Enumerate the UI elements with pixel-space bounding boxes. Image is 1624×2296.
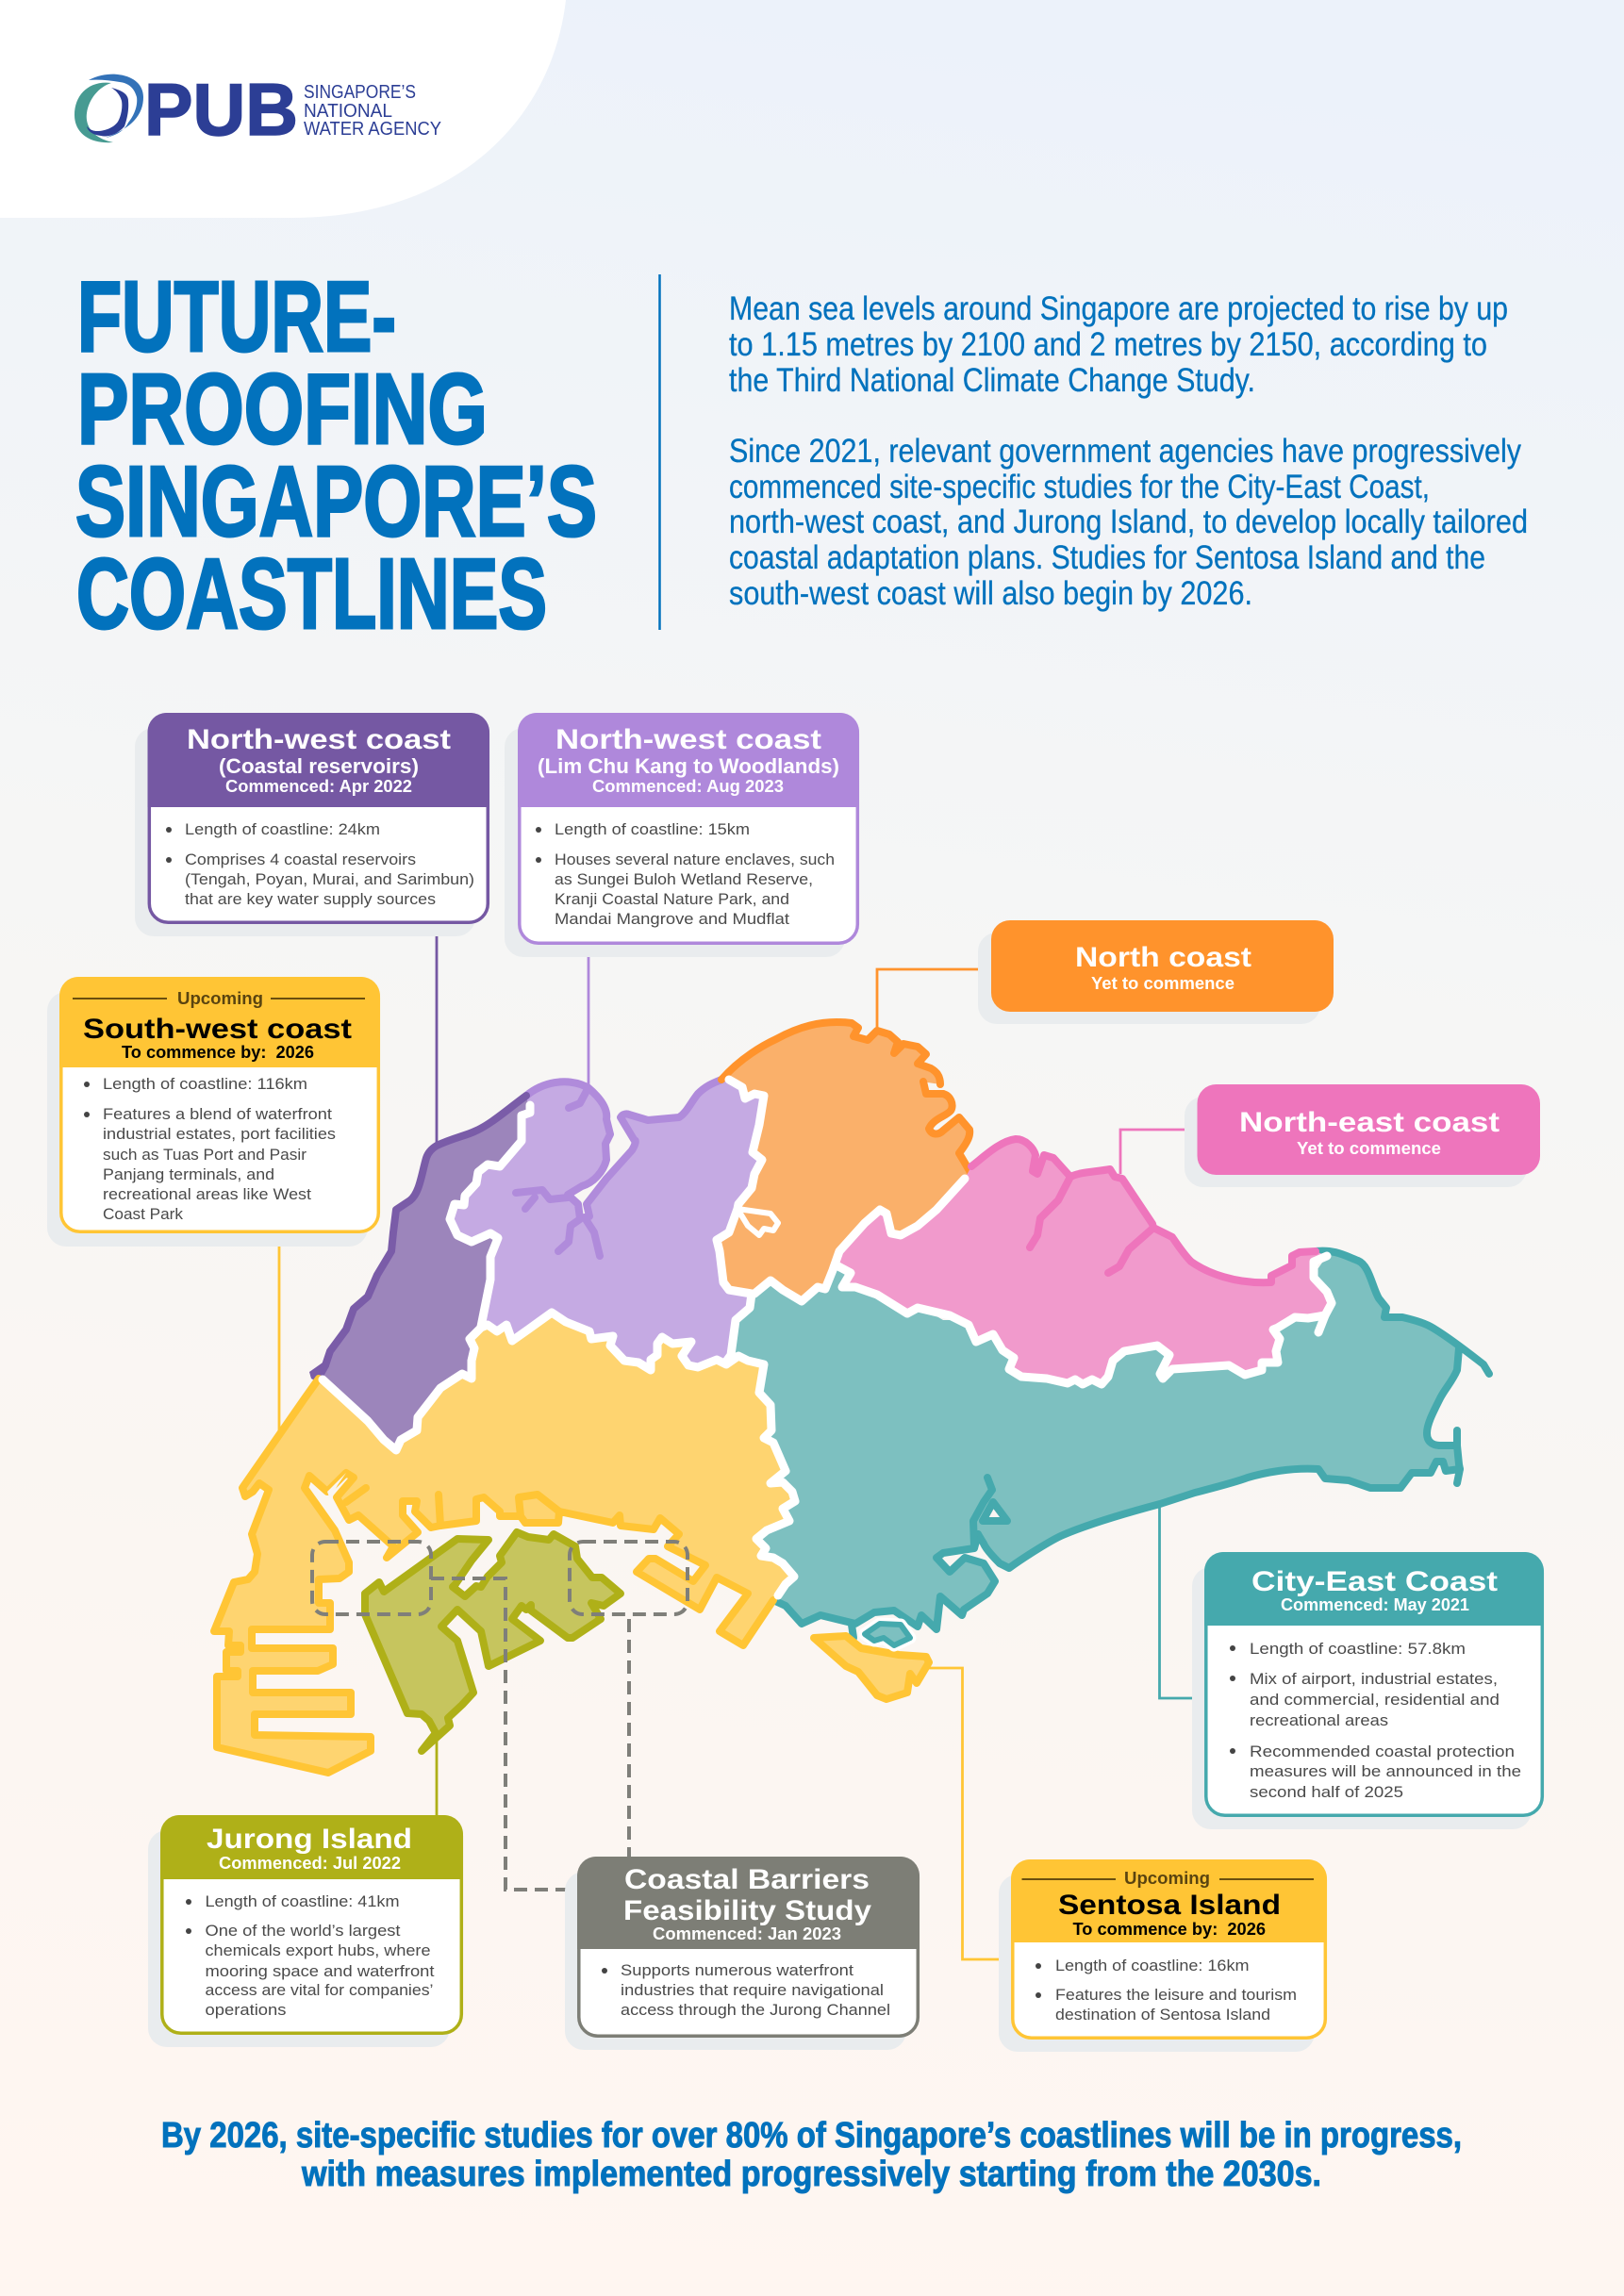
coastal barrier study areas (dashed) bbox=[312, 1542, 688, 1890]
logo: PUB Singapore's National Water Agency bbox=[75, 68, 441, 151]
details: access are vital for companies’ bbox=[206, 1981, 434, 1999]
panel: North-east coast: North-east coast bbox=[1239, 1107, 1500, 1138]
details: mooring space and waterfront bbox=[206, 1962, 435, 1980]
details: industrial estates, port facilities bbox=[103, 1125, 336, 1143]
region: South-west coast bbox=[214, 1313, 795, 1773]
white logo corner panel bbox=[0, 0, 566, 218]
details: that are key water supply sources bbox=[185, 890, 436, 908]
details: recreational areas bbox=[1250, 1711, 1388, 1729]
details: Length of coastline: 41km bbox=[206, 1892, 400, 1910]
region: Sentosa Island bbox=[814, 1636, 929, 1699]
panel: North-east coast: Yet to commence bbox=[1297, 1139, 1441, 1158]
heading: Upcoming bbox=[177, 989, 263, 1008]
heading: Commenced: Jan 2023 bbox=[653, 1924, 841, 1943]
details: operations bbox=[206, 2001, 287, 2019]
title: FUTURE- bbox=[77, 261, 396, 372]
title: SINGAPORE’S bbox=[75, 446, 597, 557]
heading: To commence by: 2026 bbox=[1073, 1920, 1266, 1939]
heading bbox=[187, 724, 451, 796]
intro text: north-west coast, and Jurong Island, to develop locally tailored bbox=[729, 504, 1528, 540]
logo tagline bbox=[304, 82, 441, 140]
details: Panjang terminals, and bbox=[103, 1165, 274, 1183]
footer statement: with measures implemented progressively starting from the 2030s. bbox=[301, 2155, 1321, 2194]
details: Mandai Mangrove and Mudflat bbox=[555, 910, 789, 928]
details: Coast Park bbox=[103, 1205, 183, 1223]
footer statement: By 2026, site-specific studies for over 80% of Singapore’s coastlines will be in progress, bbox=[161, 2116, 1462, 2156]
map of Singapore bbox=[214, 1021, 1489, 1890]
region: North-west coast (Coastal reservoirs) bbox=[309, 1096, 530, 1450]
panel: North-east coast bbox=[1185, 1084, 1540, 1187]
leader lines bbox=[279, 924, 1204, 1959]
title: PROOFING bbox=[77, 354, 488, 465]
heading bbox=[207, 1824, 412, 1873]
heading: North-west coast bbox=[555, 724, 821, 755]
heading: Sentosa Island bbox=[1058, 1890, 1281, 1921]
details: Recommended coastal protection bbox=[1250, 1743, 1515, 1760]
details: as Sungei Buloh Wetland Reserve, bbox=[555, 870, 813, 888]
panel: Jurong Island bbox=[148, 1815, 463, 2047]
logo tagline: NATIONAL bbox=[304, 101, 392, 122]
heading bbox=[73, 989, 365, 1062]
region: Jurong Island bbox=[365, 1532, 621, 1751]
details: Kranji Coastal Nature Park, and bbox=[555, 890, 789, 908]
details bbox=[1230, 1640, 1521, 1801]
icon: PUB swirl bbox=[75, 74, 143, 142]
details bbox=[602, 1961, 890, 2019]
region: North-west coast (Lim Chu Kang to Woodlands) bbox=[443, 1080, 764, 1370]
panel: Sentosa Island bbox=[999, 1859, 1327, 2052]
heading: City-East Coast bbox=[1251, 1566, 1498, 1597]
region: City-East Coast bbox=[723, 1251, 1489, 1638]
panel: South-west coast bbox=[47, 977, 380, 1247]
logo wordmark: PUB bbox=[144, 68, 298, 151]
details: destination of Sentosa Island bbox=[1055, 2006, 1270, 2023]
heading: Jurong Island bbox=[207, 1824, 412, 1855]
details: second half of 2025 bbox=[1250, 1783, 1403, 1801]
details: Length of coastline: 16km bbox=[1055, 1957, 1249, 1974]
details: recreational areas like West bbox=[103, 1185, 311, 1203]
footer statement bbox=[161, 2116, 1462, 2194]
yellow/teal boundaries (white) bbox=[323, 1313, 795, 1595]
details: One of the world’s largest bbox=[206, 1922, 401, 1940]
intro text: commenced site-specific studies for the City-East Coast, bbox=[729, 469, 1430, 505]
details bbox=[536, 820, 835, 928]
details: and commercial, residential and bbox=[1250, 1691, 1500, 1709]
details: Length of coastline: 116km bbox=[103, 1075, 307, 1093]
details: chemicals export hubs, where bbox=[206, 1941, 430, 1959]
heading bbox=[1022, 1869, 1314, 1939]
heading: South-west coast bbox=[83, 1014, 352, 1045]
panel: North-west coast (Coastal reservoirs) bbox=[135, 713, 489, 936]
heading: Coastal Barriers bbox=[624, 1864, 870, 1895]
heading: North-west coast bbox=[187, 724, 451, 755]
details: Comprises 4 coastal reservoirs bbox=[185, 851, 416, 868]
details bbox=[166, 820, 474, 908]
panel: North coast: North coast bbox=[1075, 942, 1251, 973]
heading bbox=[1251, 1566, 1498, 1614]
intro text bbox=[729, 290, 1528, 612]
intro text: coastal adaptation plans. Studies for Sentosa Island and the bbox=[729, 539, 1485, 576]
title bbox=[75, 261, 597, 650]
heading: (Coastal reservoirs) bbox=[219, 754, 419, 778]
logo tagline: SINGAPORE’S bbox=[304, 82, 416, 103]
heading: Commenced: May 2021 bbox=[1281, 1595, 1469, 1614]
details: such as Tuas Port and Pasir bbox=[103, 1146, 307, 1164]
details: (Tengah, Poyan, Murai, and Sarimbun) bbox=[185, 870, 474, 888]
small island off Sentosa bbox=[865, 1624, 910, 1645]
details: Features a blend of waterfront bbox=[103, 1105, 332, 1123]
panel: Coastal Barriers Feasibility Study bbox=[565, 1857, 920, 2050]
region: North coast bbox=[717, 1021, 971, 1301]
title: COASTLINES bbox=[76, 538, 547, 650]
details: Houses several nature enclaves, such bbox=[555, 851, 835, 868]
logo tagline: WATER AGENCY bbox=[304, 119, 441, 140]
details: industries that require navigational bbox=[621, 1981, 884, 1999]
details bbox=[186, 1892, 435, 2019]
intro text: Since 2021, relevant government agencies have progressively bbox=[729, 433, 1521, 470]
details: access through the Jurong Channel bbox=[621, 2001, 890, 2019]
intro text: the Third National Climate Change Study. bbox=[729, 362, 1255, 399]
heading: To commence by: 2026 bbox=[122, 1043, 314, 1062]
details: Features the leisure and tourism bbox=[1055, 1986, 1297, 2004]
heading: (Lim Chu Kang to Woodlands) bbox=[538, 754, 839, 778]
heading bbox=[538, 724, 839, 796]
region boundaries (white) bbox=[450, 1080, 1332, 1384]
intro text: to 1.15 metres by 2100 and 2 metres by 2150, according to bbox=[729, 326, 1487, 363]
heading: Upcoming bbox=[1124, 1869, 1210, 1888]
intro text: Mean sea levels around Singapore are projected to rise by up bbox=[729, 290, 1508, 327]
heading: Commenced: Apr 2022 bbox=[225, 777, 412, 796]
panel: North coast: Yet to commence bbox=[1091, 974, 1235, 993]
heading: Commenced: Aug 2023 bbox=[592, 777, 784, 796]
details: Length of coastline: 15km bbox=[555, 820, 750, 838]
details: measures will be announced in the bbox=[1250, 1762, 1521, 1780]
details: Length of coastline: 57.8km bbox=[1250, 1640, 1466, 1658]
region: North-east coast bbox=[837, 1139, 1332, 1384]
heading: Feasibility Study bbox=[623, 1895, 871, 1926]
heading bbox=[623, 1864, 871, 1943]
details: Supports numerous waterfront bbox=[621, 1961, 853, 1979]
details bbox=[84, 1075, 336, 1223]
heading: Commenced: Jul 2022 bbox=[219, 1854, 401, 1873]
details: Mix of airport, industrial estates, bbox=[1250, 1670, 1498, 1688]
intro text: south-west coast will also begin by 2026. bbox=[729, 575, 1252, 612]
details: Length of coastline: 24km bbox=[185, 820, 380, 838]
panel: City-East Coast bbox=[1192, 1552, 1544, 1829]
details bbox=[1036, 1957, 1297, 2023]
panel: North coast bbox=[978, 920, 1334, 1024]
panel: North-west coast (Lim Chu Kang to Woodlands) bbox=[505, 713, 859, 957]
